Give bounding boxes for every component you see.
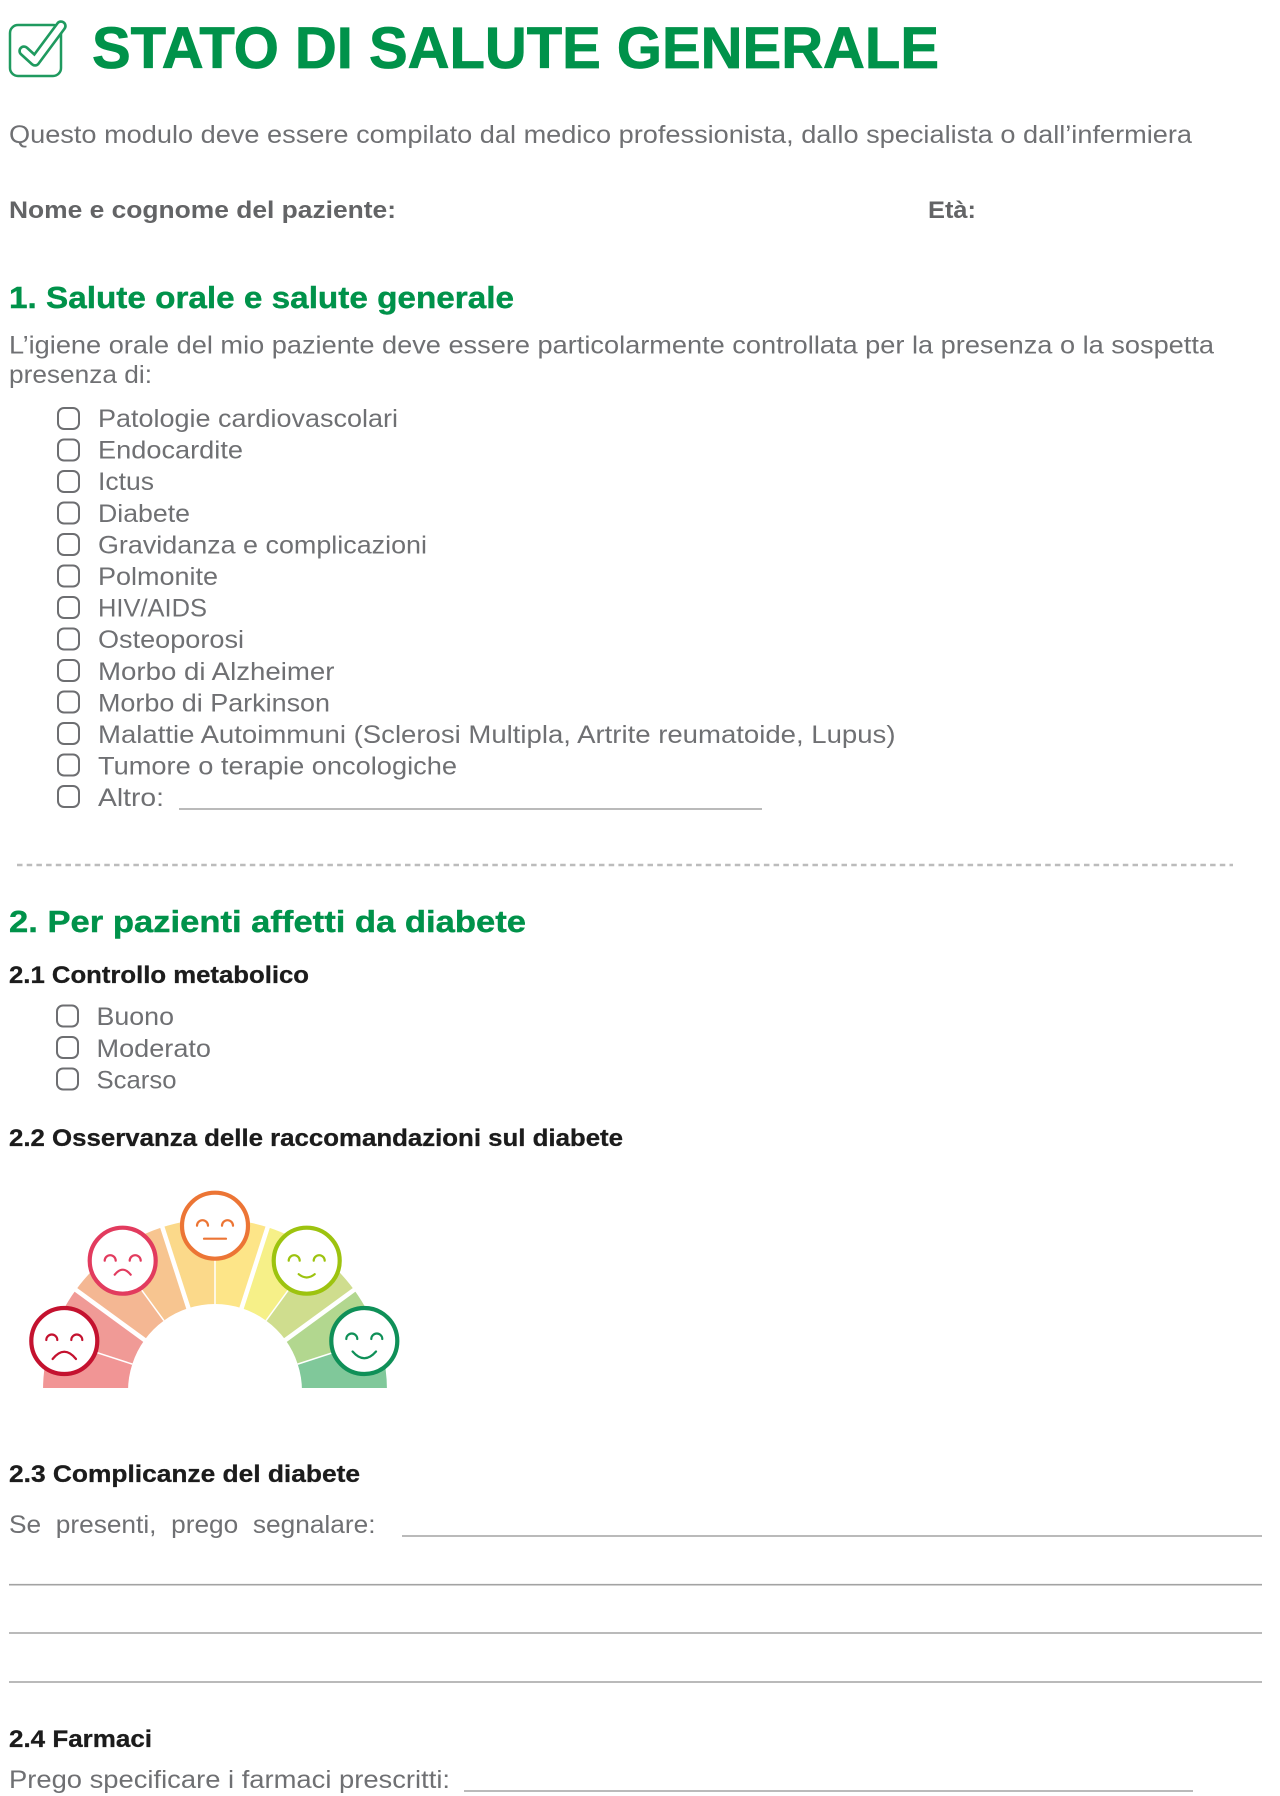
heading: section 2: 2. Per pazienti affetti da diabete xyxy=(9,904,526,939)
checklist: conditions: Morbo di Parkinson xyxy=(98,689,330,717)
age field: Età: xyxy=(928,197,976,224)
checklist: conditions: Morbo di Alzheimer xyxy=(98,658,334,686)
checklist: conditions: Osteoporosi xyxy=(98,626,244,654)
checklist: conditions: Altro: xyxy=(98,784,164,812)
subheading 2.3: 2.3 Complicanze del diabete xyxy=(9,1461,360,1488)
subheading 2.1: 2.1 Controllo metabolico xyxy=(9,962,309,989)
section 1 intro text xyxy=(9,332,1214,389)
checklist: conditions: Malattie Autoimmuni (Sclerosi Multipla, Artrite reumatoide, Lupus) xyxy=(98,721,896,749)
checklist: metabolic control xyxy=(57,1003,211,1095)
title: STATO DI SALUTE GENERALE xyxy=(92,16,939,81)
icon: sad face xyxy=(90,1228,156,1294)
checklist: metabolic control: Buono xyxy=(96,1003,174,1031)
checklist: conditions: Gravidanza e complicazioni xyxy=(98,531,427,559)
medication prompt with fill-in line: Prego specificare i farmaci prescritti: xyxy=(9,1766,450,1794)
subheading 2.2: 2.2 Osservanza delle raccomandazioni sul diabete xyxy=(9,1125,623,1152)
checklist: conditions: Ictus xyxy=(98,468,154,496)
subtitle: Questo modulo deve essere compilato dal medico professionista, dallo specialista o dall’infermiera xyxy=(9,121,1192,149)
checklist: conditions: Polmonite xyxy=(98,563,218,591)
checklist: conditions: HIV/AIDS xyxy=(98,595,207,623)
icon: very happy face xyxy=(331,1308,397,1374)
checklist: metabolic control: Scarso xyxy=(96,1067,176,1095)
checklist: conditions: Tumore o terapie oncologiche xyxy=(98,753,457,781)
gauge: recommendation adherence xyxy=(31,1193,397,1396)
section 1 intro text: presenza di: xyxy=(9,361,152,389)
checklist: conditions: Endocardite xyxy=(98,437,243,465)
icon: happy face xyxy=(274,1228,340,1294)
icon: very sad face xyxy=(31,1308,97,1374)
complications prompt with fill-in lines: Se presenti, prego segnalare: xyxy=(9,1511,376,1539)
icon: neutral face xyxy=(182,1193,248,1259)
checklist: conditions xyxy=(58,405,896,812)
icon: check mark in box xyxy=(10,25,61,76)
checklist: conditions: Patologie cardiovascolari xyxy=(98,405,398,433)
checklist: metabolic control: Moderato xyxy=(96,1035,211,1063)
checklist: conditions: Diabete xyxy=(98,500,190,528)
patient name field: Nome e cognome del paziente: xyxy=(9,197,396,224)
subheading 2.4: 2.4 Farmaci xyxy=(9,1726,152,1753)
heading: section 1: 1. Salute orale e salute generale xyxy=(9,280,514,315)
section 1 intro text: L’igiene orale del mio paziente deve essere particolarmente controllata per la presenza o la sospetta xyxy=(9,332,1214,360)
